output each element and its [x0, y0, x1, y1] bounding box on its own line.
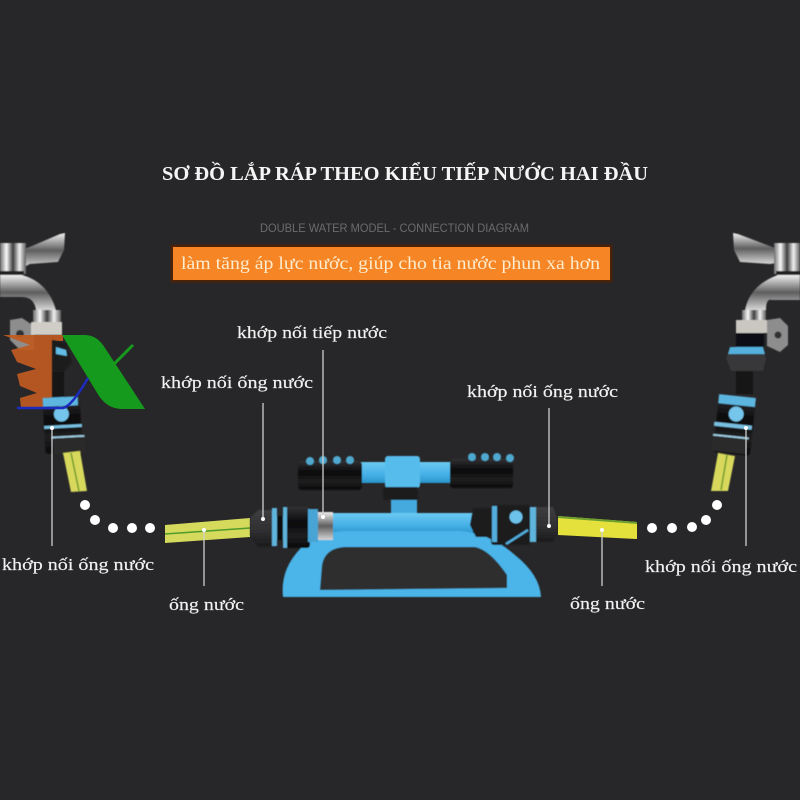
- hose: right: [558, 516, 637, 539]
- label: water inlet joint: khớp nối tiếp nước: [237, 323, 388, 342]
- hose: left: [165, 518, 250, 543]
- subtitle: DOUBLE WATER MODEL - CONNECTION DIAGRAM: [260, 221, 529, 235]
- dotted flow: right: [647, 500, 722, 533]
- logo: green letter: [62, 335, 145, 409]
- connector: right nut: [470, 508, 494, 537]
- label: left faucet connector: khớp nối ống nước: [2, 555, 155, 574]
- title: SƠ ĐỒ LẮP RÁP THEO KIỂU TIẾP NƯỚC HAI ĐẦU: [162, 161, 648, 185]
- left faucet: hose connector: [43, 340, 87, 492]
- leader: top right connector: [547, 408, 551, 528]
- connector: left body: [272, 507, 333, 548]
- callout: orange banner: [170, 244, 612, 282]
- logo: blue stroke: [17, 378, 88, 408]
- leader: right hose: [600, 528, 604, 586]
- leader: right faucet connector: [744, 426, 748, 546]
- connector: left outer cap: [250, 510, 275, 547]
- sprinkler: [250, 453, 557, 597]
- leader: left hose: [202, 528, 206, 586]
- sprinkler: dark inset: [320, 547, 507, 590]
- sprinkler: rotating arm: [298, 453, 514, 520]
- left faucet: tap: [0, 233, 65, 350]
- leader: left faucet connector: [50, 426, 54, 546]
- dotted flow: left: [80, 500, 155, 533]
- label: left hose: ống nước: [169, 595, 245, 614]
- connector: right body: [491, 505, 557, 545]
- leader: water inlet joint: [321, 350, 325, 519]
- callout: orange banner: làm tăng áp lực nước, giúp cho tia nước phun xa hơn: [181, 253, 600, 273]
- leader: top left connector: [261, 403, 265, 521]
- leader lines and labels: [2, 323, 798, 614]
- label: right faucet connector: khớp nối ống nước: [645, 557, 798, 576]
- sprinkler: blue base: [283, 531, 541, 597]
- label: right hose: ống nước: [570, 594, 646, 613]
- logo: green stroke: [113, 345, 133, 365]
- right faucet assembly: [711, 233, 800, 491]
- label: top left connector: khớp nối ống nước: [161, 373, 314, 392]
- sprinkler: water pipe: [333, 513, 473, 534]
- label: top right connector: khớp nối ống nước: [467, 382, 619, 401]
- logo: orange mark: [3, 335, 63, 408]
